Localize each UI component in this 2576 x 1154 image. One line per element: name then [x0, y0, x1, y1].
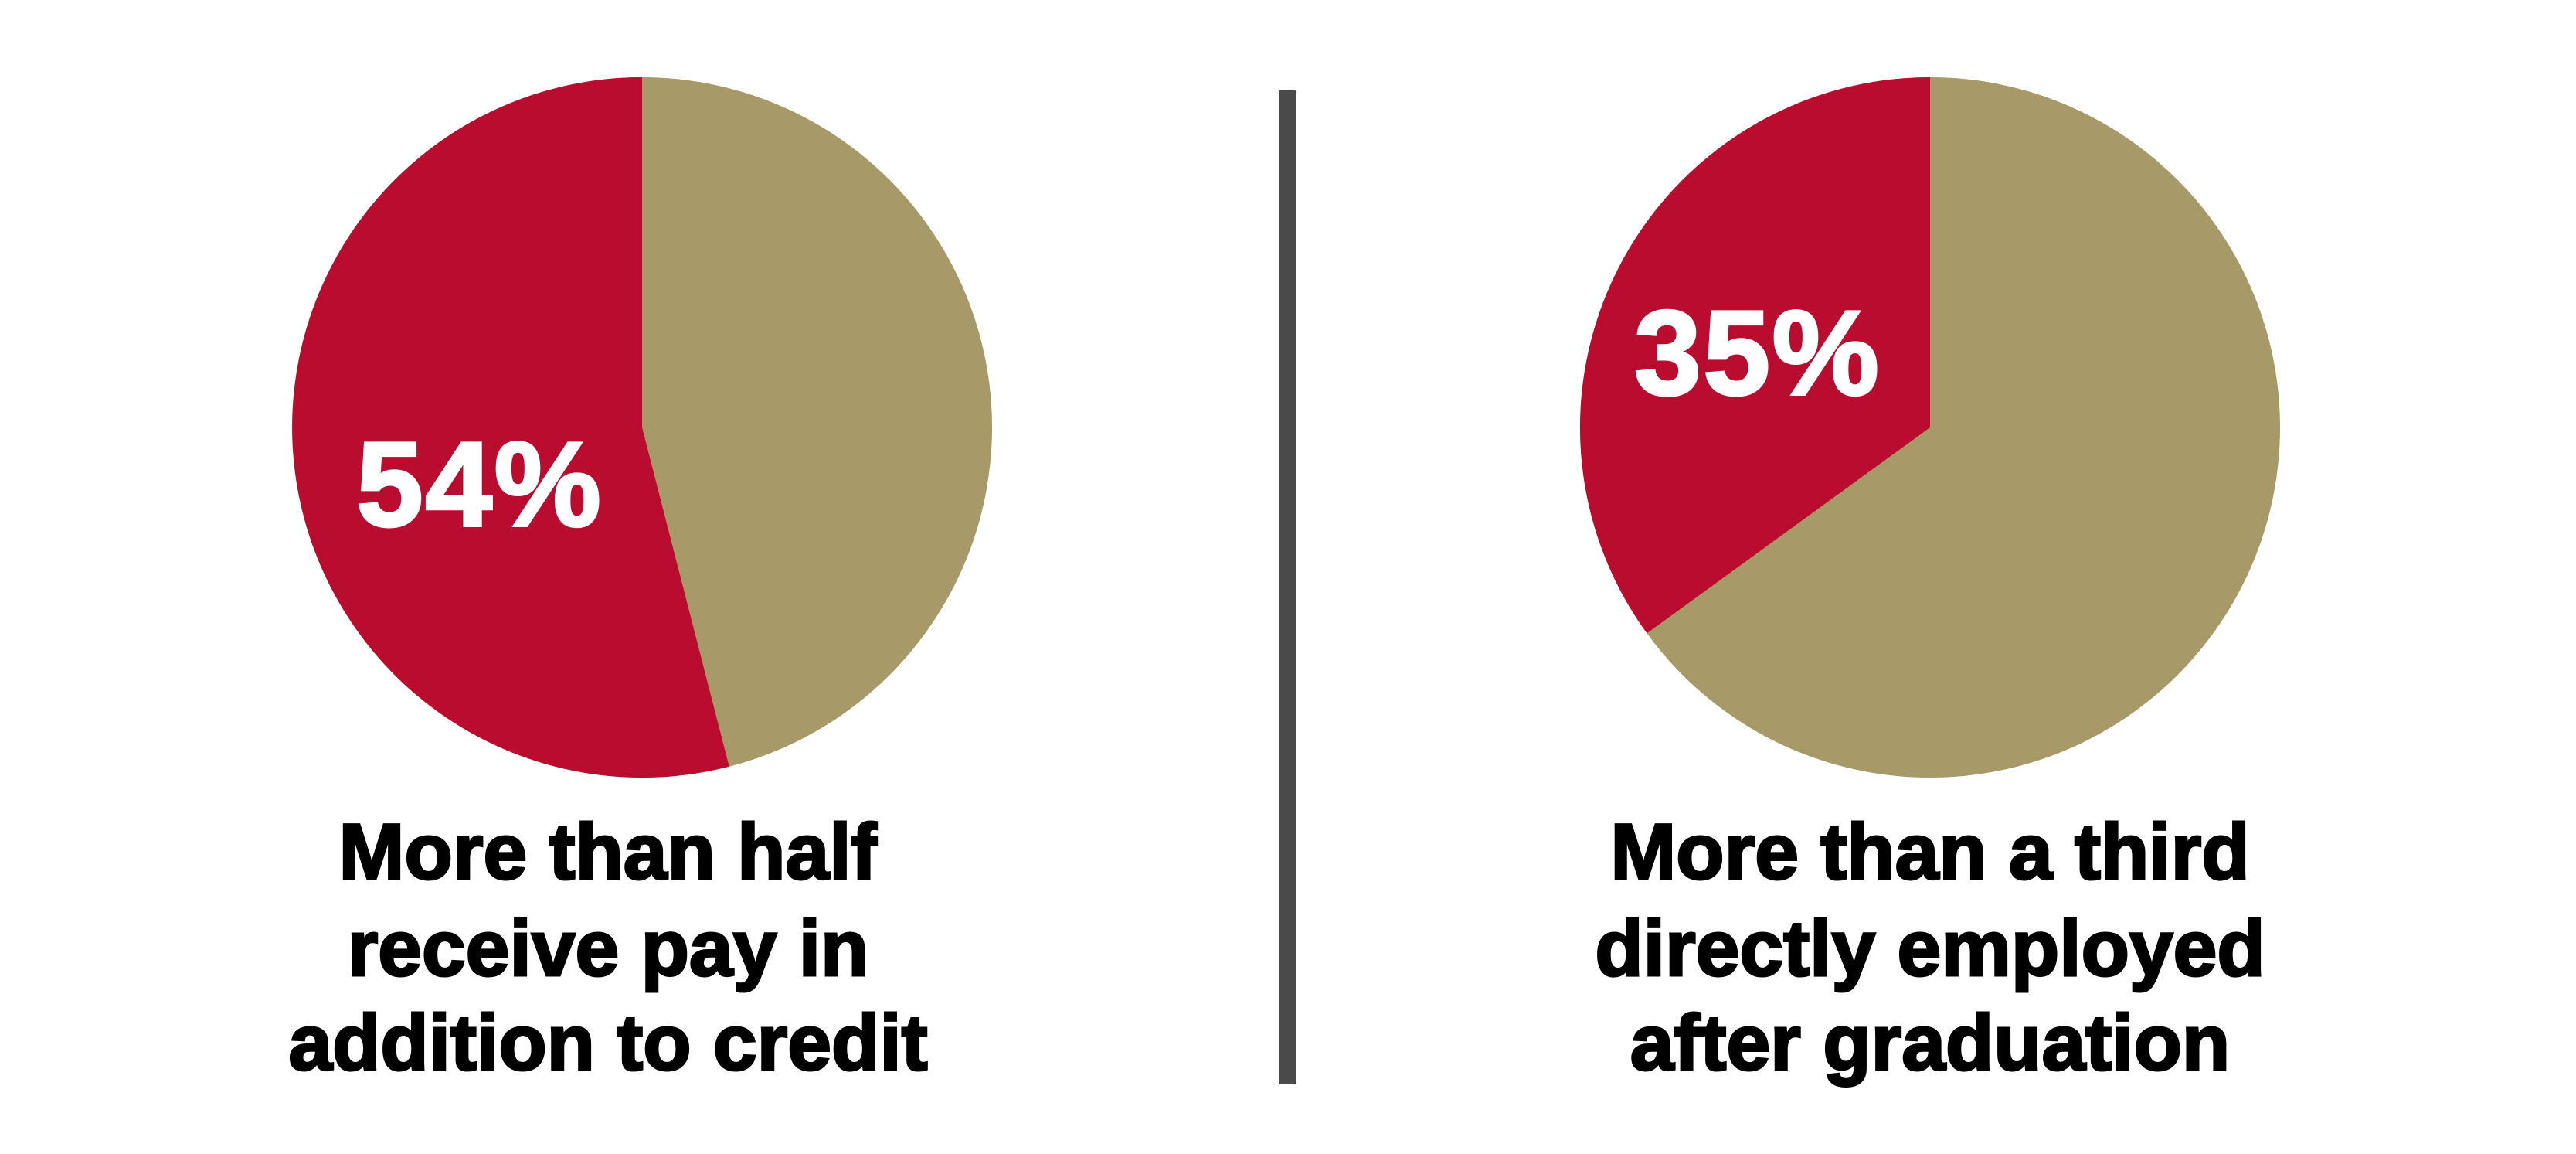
caption: right — [1595, 808, 2265, 1087]
pie chart: directly employed — [1580, 77, 2280, 778]
pie chart: pay in addition to credit — [292, 77, 992, 778]
caption: left: receive pay in — [348, 904, 868, 992]
caption: left: More than half — [338, 808, 878, 896]
caption: left: addition to credit — [288, 999, 928, 1087]
caption: right: directly employed — [1595, 904, 2265, 992]
caption: left — [288, 808, 928, 1087]
caption: right: More than a third — [1610, 808, 2250, 896]
label: 35%: 35% — [1634, 286, 1881, 420]
label: 54%: 54% — [356, 417, 603, 551]
caption: right: after graduation — [1630, 999, 2230, 1087]
divider — [1279, 90, 1296, 1084]
